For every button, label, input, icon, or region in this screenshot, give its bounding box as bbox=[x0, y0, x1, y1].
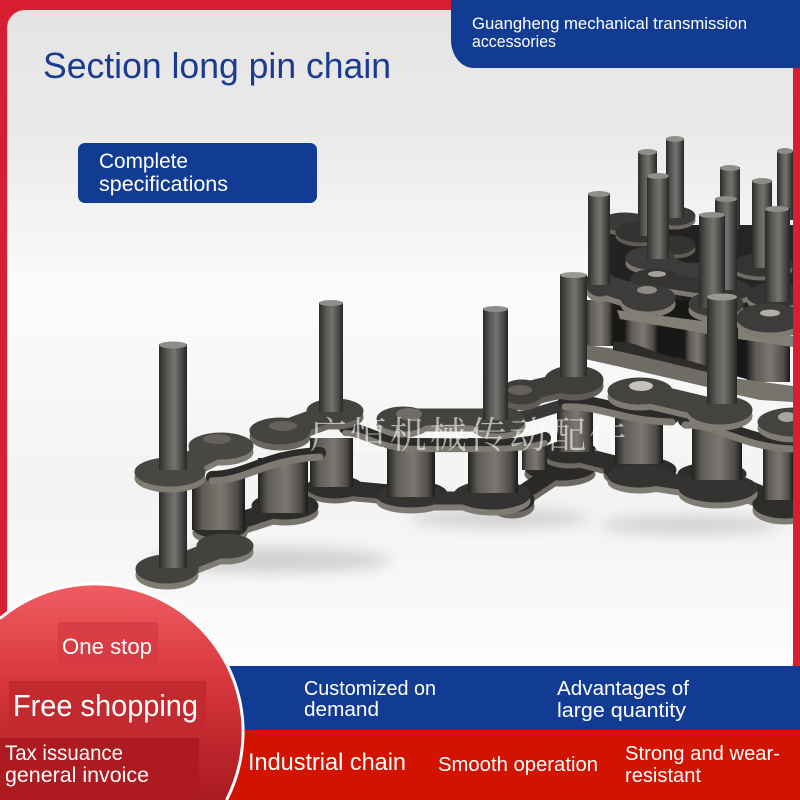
title: Section long pin chain bbox=[43, 45, 391, 86]
rollers bbox=[192, 402, 793, 530]
badge: complete specifications: Complete bbox=[99, 150, 188, 173]
right red border bbox=[793, 0, 800, 680]
floor shadows bbox=[150, 509, 780, 573]
promo: one stop bbox=[58, 622, 158, 665]
promo: tax invoice bbox=[0, 738, 199, 800]
brand tab: Guangheng mechanical transmission bbox=[472, 14, 747, 33]
red feature band bbox=[0, 730, 800, 800]
promo: free shopping bbox=[9, 681, 206, 731]
lower chain plates bbox=[136, 441, 800, 589]
brand tab bbox=[451, 0, 800, 68]
long pin lower section bbox=[159, 480, 187, 568]
rear chain photo bbox=[585, 136, 800, 402]
blue feature band: demand bbox=[304, 699, 379, 721]
blue feature band: Advantages of bbox=[557, 678, 689, 700]
promo: free shopping: Free shopping bbox=[13, 688, 198, 723]
long pins bbox=[159, 272, 737, 470]
red feature band: Industrial chain bbox=[248, 749, 406, 776]
promo: tax invoice: general invoice bbox=[5, 764, 149, 787]
promo: one stop: One stop bbox=[62, 634, 152, 659]
blue feature band: Customized on bbox=[304, 678, 436, 700]
blue feature band: large quantity bbox=[557, 700, 686, 722]
blue feature band bbox=[0, 666, 800, 730]
red feature band: Strong and wear- bbox=[625, 743, 780, 765]
outer link plates bbox=[135, 366, 800, 492]
promo: tax invoice: Tax issuance bbox=[5, 742, 123, 765]
red feature band: resistant bbox=[625, 765, 701, 787]
watermark: 广恒机械传动配件 bbox=[310, 415, 626, 457]
front chain photo bbox=[135, 272, 800, 589]
brand tab: accessories bbox=[472, 32, 556, 51]
badge: complete specifications: specifications bbox=[99, 173, 228, 196]
badge: complete specifications bbox=[78, 143, 317, 203]
promo circle bbox=[0, 584, 243, 800]
inner link plates bbox=[212, 402, 793, 481]
red feature band: Smooth operation bbox=[438, 754, 598, 776]
